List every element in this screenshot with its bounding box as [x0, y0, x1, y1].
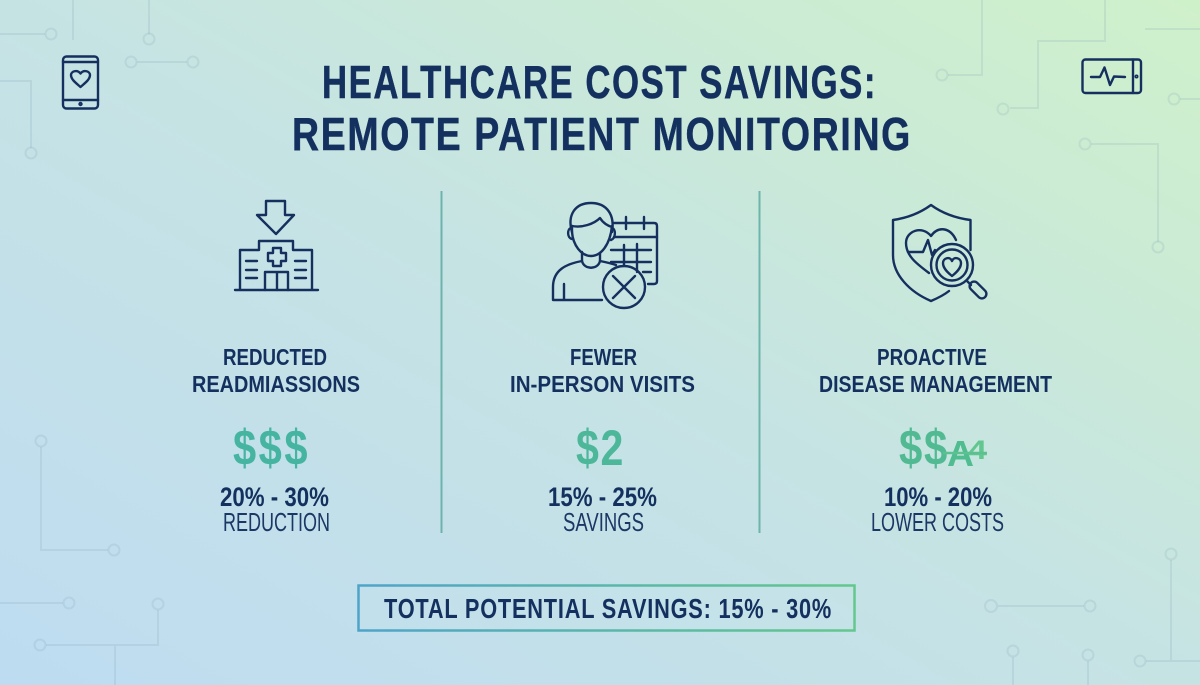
panel: fewer visits	[510, 203, 695, 537]
heading	[819, 344, 1052, 397]
panel: reduced readmissions	[192, 201, 360, 537]
callout: total savings	[358, 586, 854, 630]
stat: 20% - 30%	[220, 482, 329, 512]
dollar signs: $$$	[233, 420, 310, 476]
heading: PROACTIVE	[877, 344, 987, 370]
stat label: REDUCTION	[223, 507, 330, 537]
panel: proactive disease management	[819, 205, 1052, 537]
heading: REDUCTED	[223, 344, 327, 370]
heading: READMIASSIONS	[192, 371, 360, 397]
title	[292, 56, 912, 160]
stat label: SAVINGS	[563, 507, 644, 537]
stat: 15% - 25%	[548, 482, 657, 512]
heading: IN-PERSON VISITS	[510, 371, 695, 397]
dollar value: $2	[576, 420, 625, 476]
title: HEALTHCARE COST SAVINGS:	[322, 56, 877, 108]
heading	[192, 344, 360, 397]
icon: phone with heart	[63, 56, 98, 108]
stat label: LOWER COSTS	[871, 507, 1004, 537]
heading: DISEASE MANAGEMENT	[819, 371, 1052, 397]
icon: person with calendar and cross	[553, 203, 657, 308]
title: REMOTE PATIENT MONITORING	[292, 108, 912, 160]
icon: hospital with down arrow	[235, 201, 318, 290]
callout: total savings: TOTAL POTENTIAL SAVINGS: 15% - 30%	[384, 593, 832, 624]
icon: shield, heart and magnifier	[893, 205, 988, 301]
dollar value: A	[947, 433, 974, 474]
stat: 10% - 20%	[884, 482, 992, 512]
divider: left	[440, 191, 442, 533]
icon: tablet with pulse	[1082, 60, 1141, 93]
dollar value: 4	[968, 435, 987, 465]
dollar value: $$	[899, 420, 949, 476]
divider: right	[758, 191, 760, 533]
dollar value	[899, 420, 987, 476]
heading: FEWER	[570, 344, 637, 370]
heading	[510, 344, 695, 397]
